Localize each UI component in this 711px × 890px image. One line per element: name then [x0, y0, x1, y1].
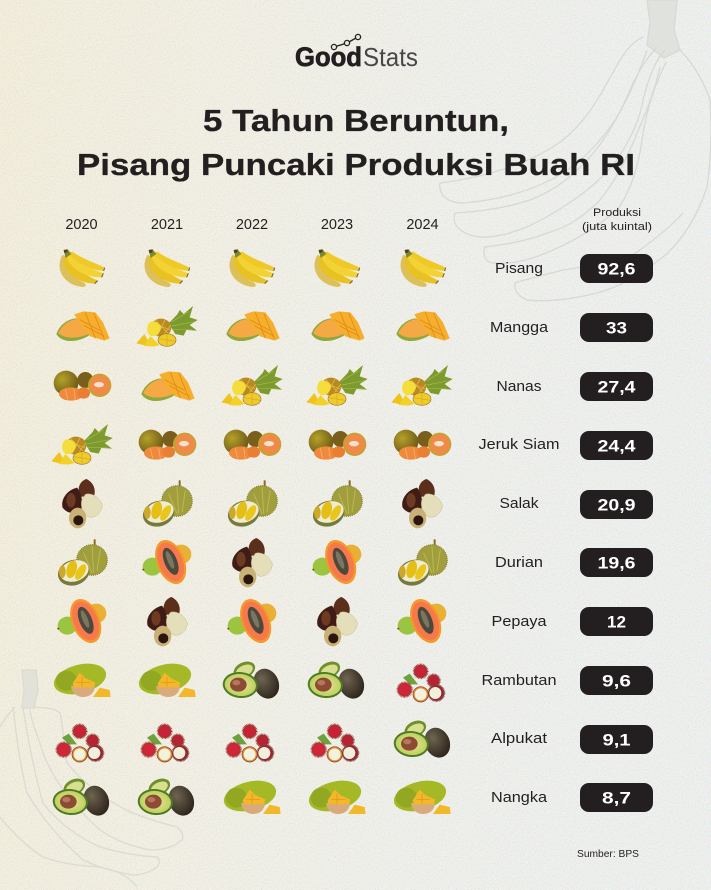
- production value pills: 19,6: [598, 554, 636, 572]
- row 9 icons: [57, 717, 455, 762]
- fruit labels: Pisang: [495, 261, 543, 277]
- row 6 icons: [55, 535, 447, 590]
- production value pills: 9,6: [602, 672, 631, 690]
- production value pills: 27,4: [598, 378, 636, 396]
- fruit labels: Rambutan: [482, 673, 556, 689]
- fruit labels: Alpukat: [491, 731, 547, 747]
- decorative banana sketch: top right: [440, 0, 711, 301]
- production column header: Produksi: [593, 207, 641, 219]
- row 8 icons: [51, 658, 444, 703]
- fruit ranking grid: [51, 249, 455, 820]
- fruit labels: Mangga: [490, 320, 549, 336]
- fruit labels: [478, 261, 560, 806]
- fruit labels: Jeruk Siam: [478, 437, 560, 453]
- row 7 icons: [57, 594, 447, 648]
- year headers: 2023: [321, 217, 353, 233]
- year headers: 2022: [236, 217, 268, 233]
- fruit labels: Durian: [495, 555, 543, 571]
- production value pills: 8,7: [602, 788, 631, 808]
- production column header: [582, 207, 652, 233]
- production value pills: 24,4: [598, 436, 636, 456]
- title: 5 Tahun Beruntun,: [203, 103, 509, 138]
- production value pills: 92,6: [598, 260, 636, 278]
- production column header: (juta kuintal): [582, 221, 652, 233]
- production value pills: 9,1: [602, 730, 630, 750]
- title: Pisang Puncaki Produksi Buah RI: [77, 147, 635, 182]
- row 10 icons: [51, 775, 451, 820]
- row 1 icons: banana: [60, 249, 446, 287]
- logo: GoodStats: Stats: [363, 42, 418, 72]
- year headers: 2020: [65, 217, 98, 233]
- row 3 icons: [54, 365, 453, 406]
- source note: Sumber: BPS: [577, 849, 639, 860]
- production value pills: 20,9: [598, 496, 636, 514]
- row 5 icons: [62, 479, 442, 531]
- production value pills: 33: [606, 318, 627, 338]
- row 2 icons: [56, 306, 450, 347]
- logo: GoodStats: Good: [295, 42, 362, 72]
- year headers: 2021: [151, 217, 183, 233]
- year headers: 2024: [406, 217, 439, 233]
- logo: GoodStats: [295, 34, 418, 72]
- year headers: [65, 217, 439, 233]
- production value pills: 12: [607, 612, 626, 632]
- title: [77, 103, 635, 182]
- production value pills: [580, 254, 653, 812]
- row 4 icons: [51, 424, 451, 465]
- fruit labels: Nangka: [491, 790, 548, 806]
- fruit labels: Pepaya: [492, 614, 548, 630]
- fruit labels: Nanas: [496, 379, 542, 395]
- decorative banana sketch: bottom left: [0, 670, 183, 887]
- fruit labels: Salak: [500, 496, 539, 512]
